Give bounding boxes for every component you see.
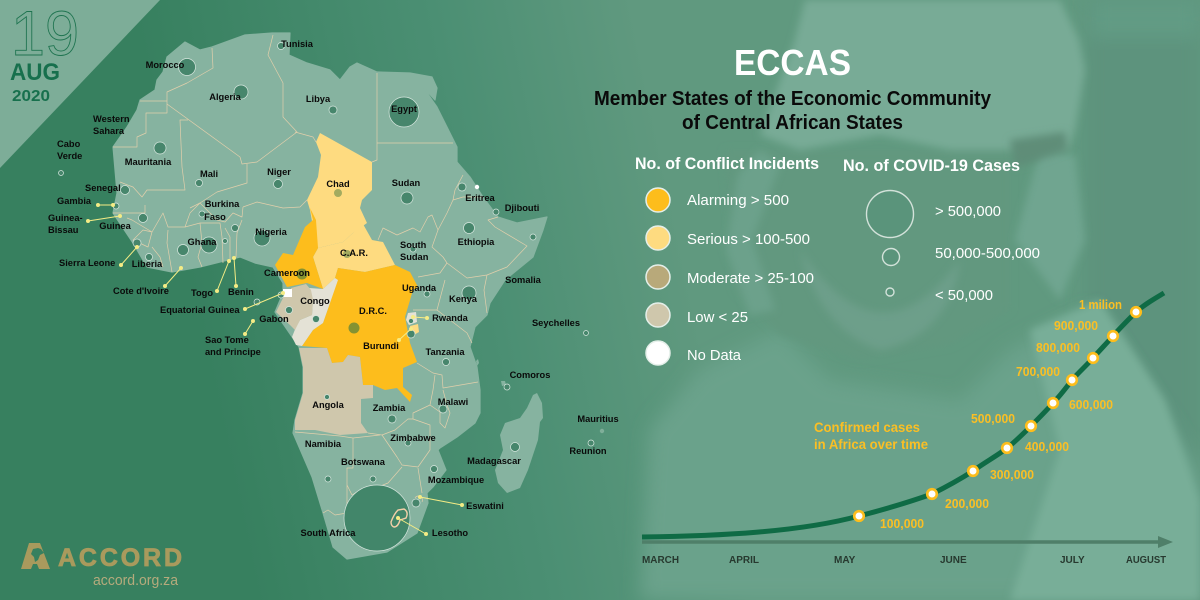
country labels: Mauritius [577,414,619,424]
country labels: Namibia [305,439,342,449]
country labels: Sierra Leone [59,258,115,268]
country labels: Cabo [57,139,81,149]
country labels: Ethiopia [458,237,495,247]
Madagascar and islands [476,359,543,493]
month labels [642,555,1166,566]
country labels: Botswana [341,457,386,467]
date month: AUG [10,59,60,86]
country labels: Burundi [363,341,399,351]
Burundi [410,324,419,336]
country labels: Seychelles [532,318,580,328]
legend: COVID-19 cases [843,156,1040,304]
country labels: Tanzania [425,347,465,357]
Equatorial Guinea [283,289,292,297]
country labels: Nigeria [255,227,288,237]
country labels: Cameroon [264,268,310,278]
time axis arrow [642,540,1162,544]
curve markers [854,307,1141,521]
curve value labels: 800,000 [1036,341,1080,355]
legend heading: No. of COVID-19 Cases [843,156,1020,175]
land mass [113,33,547,559]
logo url: accord.org.za [93,573,179,589]
Mauritius case circle [600,429,604,433]
cases curve [642,293,1164,537]
country labels: Ghana [188,237,217,247]
South Africa case circle [344,485,410,551]
Central African Republic [313,224,395,289]
curve value labels: 700,000 [1016,365,1060,379]
photo: masked medical worker [640,0,1200,600]
country labels: Bissau [48,225,79,235]
country labels: Morocco [146,60,185,70]
month labels: MAY [834,555,856,566]
legend: conflict incidents: Low < 25 [687,309,748,326]
borders [113,35,527,515]
country labels: Mozambique [428,475,484,485]
chart caption: in Africa over time [814,437,928,452]
country labels: Burkina [205,199,240,209]
subtitle [594,88,992,134]
Chad [307,133,372,248]
legend heading: No. of Conflict Incidents [635,154,819,173]
legend: COVID-19 cases: > 500,000 [935,203,1001,220]
country labels: Niger [267,167,291,177]
Lesotho outline [391,509,407,527]
ACCORD logo [21,543,182,589]
country labels: Algeria [209,92,242,102]
country labels: Guinea [99,221,132,231]
country labels: Rwanda [432,313,469,323]
Chad case circle [334,189,342,197]
legend: COVID-19 cases: < 50,000 [935,287,993,304]
country labels: Verde [57,151,82,161]
country labels: Malawi [438,397,468,407]
Democratic Republic of Congo [302,265,418,402]
country labels [48,39,619,538]
CAR case circle [343,250,351,258]
country labels: Sudan [392,178,421,188]
country labels: Eritrea [465,193,496,203]
country labels: Gabon [259,314,289,324]
legend: conflict incidents [635,154,819,365]
curve value labels: 400,000 [1025,440,1069,454]
country labels: Mauritania [125,157,172,167]
Rwanda [406,312,417,325]
country labels: Sao Tome [205,335,249,345]
country labels: Western [93,114,130,124]
country labels: and Principe [205,347,261,357]
country labels: Eswatini [466,501,504,511]
chart caption: Confirmed cases [814,420,920,435]
country labels: Sahara [93,126,125,136]
curve value labels: 900,000 [1054,319,1098,333]
COVID case circles [58,42,604,551]
curve value labels: 500,000 [971,412,1015,426]
month labels: AUGUST [1126,555,1166,566]
country labels: South [400,240,427,250]
month labels: JUNE [940,555,967,566]
country labels: Cote d'Ivoire [113,286,169,296]
Angola [295,348,373,435]
country labels: Djibouti [505,203,539,213]
DRC case circle [348,322,360,334]
country labels: Zambia [373,403,406,413]
legend: conflict incidents: Alarming > 500 [687,192,789,209]
country labels: Comoros [510,370,550,380]
Gabon [276,284,313,330]
month labels: JULY [1060,555,1085,566]
country labels: Faso [204,212,226,222]
country labels: Kenya [449,294,478,304]
subtitle: Member States of the Economic Community [594,88,992,110]
country labels: Angola [312,400,345,410]
country labels: Uganda [402,283,437,293]
country labels: Tunisia [281,39,314,49]
logo icon [21,543,50,569]
country labels: Sudan [400,252,429,262]
country labels: Lesotho [432,528,468,538]
curve value labels: 600,000 [1069,398,1113,412]
legend: conflict incidents: Serious > 100-500 [687,231,810,248]
country labels: Madagascar [467,456,521,466]
Eritrea no data dot [475,185,479,189]
date panel [0,0,160,168]
country labels: Reunion [569,446,607,456]
date year: 2020 [12,88,50,105]
country labels: Liberia [132,259,163,269]
logo wordmark: ACCORD [58,544,182,572]
country labels: D.R.C. [359,306,387,316]
curve value labels [880,298,1122,531]
Cameroon [275,208,323,289]
curve value labels: 1 milion [1079,298,1122,312]
Cameroon case circle [296,268,308,280]
country labels: Gambia [57,196,92,206]
subtitle: of Central African States [682,112,903,134]
Congo [292,278,338,346]
country labels: Chad [326,179,350,189]
country labels: South Africa [301,528,356,538]
curve value labels: 100,000 [880,517,924,531]
country labels: Benin [228,287,254,297]
date day: 19 [11,0,79,69]
country labels: Egypt [391,104,417,114]
date triangle [0,0,160,168]
legend: COVID-19 cases: 50,000-500,000 [935,245,1040,262]
chart caption [814,420,928,452]
month labels: APRIL [729,555,759,566]
title: ECCAS [734,42,851,83]
month labels: MARCH [642,555,679,566]
map of Africa [113,33,547,559]
country labels: C.A.R. [340,248,368,258]
curve value labels: 200,000 [945,497,989,511]
country labels: Somalia [505,275,542,285]
country labels: Congo [300,296,330,306]
legend: conflict incidents: No Data [687,347,742,364]
country labels: Togo [191,288,213,298]
country labels: Libya [306,94,331,104]
country labels: Equatorial Guinea [160,305,240,315]
country labels: Senegal [85,183,121,193]
leader lines [86,203,464,536]
country labels: Mali [200,169,218,179]
line chart: confirmed cases [642,293,1173,566]
legend: conflict incidents: Moderate > 25-100 [687,270,814,287]
curve value labels: 300,000 [990,468,1034,482]
country labels: Zimbabwe [390,433,436,443]
country labels: Guinea- [48,213,83,223]
